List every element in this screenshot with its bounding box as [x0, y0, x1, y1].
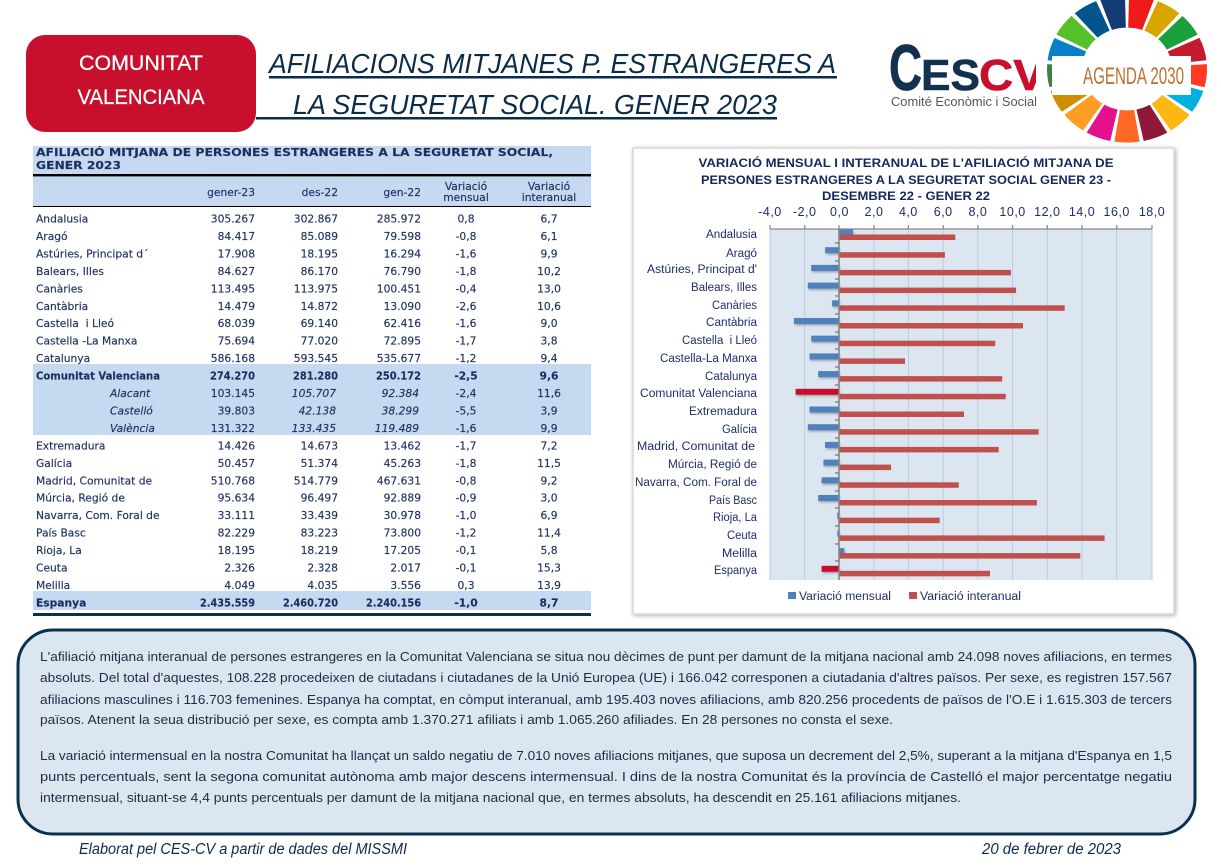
row: València: València: [110, 422, 155, 435]
row: Madrid: -0,8: [456, 474, 477, 487]
row: València: 119.489: [375, 422, 419, 435]
row: Astúries: Astúries, Principat d´: [36, 247, 148, 260]
row: Galícia: 50.457: [218, 457, 255, 470]
row: Melilla: [36, 579, 561, 592]
category labels: Castella-La Manxa: [660, 353, 758, 365]
row: Galícia: 51.374: [301, 457, 338, 470]
legend: Variació mensual: [799, 591, 891, 603]
row: Alacant: Alacant: [109, 387, 151, 400]
row: Aragó: 6,1: [540, 230, 558, 243]
row: Castelló: 42.138: [299, 404, 336, 418]
row: Ceuta: 2.017: [390, 562, 421, 574]
row: País Basc: País Basc: [36, 527, 86, 540]
row: Madrid: 9,2: [540, 474, 558, 487]
row: València: [110, 422, 558, 435]
row: Navarra: 30.978: [384, 509, 421, 522]
row: Madrid: 510.768: [211, 474, 255, 487]
top axis labels: 0,0: [830, 205, 849, 219]
row: Astúries: 16.294: [384, 247, 421, 260]
row: Balears: 86.170: [301, 265, 338, 278]
row: Múrcia: -0,9: [456, 492, 477, 505]
row: Comunitat Valenciana: 274.270: [210, 370, 255, 383]
row: Aragó: -0,8: [456, 230, 477, 243]
row: Castella-La Manxa: -1,7: [456, 335, 476, 348]
row: Andalusia: 305.267: [211, 212, 255, 226]
category labels: Castella i Lleó: [682, 335, 757, 347]
annual variation bars: [839, 234, 1105, 576]
row: Cantàbria: -2,6: [456, 300, 477, 313]
row: Rioja: 18.219: [301, 544, 338, 557]
row: Melilla: 13,9: [537, 579, 561, 592]
row: Espanya: 2.240.156: [366, 596, 421, 610]
row: Navarra: 6,9: [540, 509, 558, 522]
row: Andalusia: 6,7: [540, 212, 558, 226]
row: Catalunya: [36, 352, 558, 365]
row: País Basc: 82.229: [218, 527, 255, 540]
row: Andalusia: 302.867: [294, 212, 338, 226]
category labels: Extremadura: [689, 406, 758, 418]
paragraph 1: afiliacions masculines i 116.703 femenines. Espanya ha comptat, en còmput interanual, amb 195.403 noves afiliacions, amb 820.256 procedents de països de l'O.E i 1.615.303 de tercers: [40, 692, 1173, 707]
category labels: Andalusia: [706, 229, 758, 241]
badge: Comunitat Valenciana: [26, 35, 256, 132]
row: Castelló: 3,9: [540, 404, 558, 418]
row: País Basc: [36, 527, 561, 540]
top axis labels: 4,0: [899, 205, 918, 219]
paragraph 2: La variació intermensual en la nostra Comunitat ha llançat un saldo negatiu de 7.010 noves afiliacions mitjanes, que suposa un decrement del 2,5%, superant a la mitjana d'Espanya en 1,5: [40, 748, 1172, 763]
category labels: Aragó: [726, 248, 757, 260]
row: Comunitat Valenciana: Comunitat Valenciana: [36, 370, 160, 383]
paragraph 1: L'afiliació mitjana interanual de persones estrangeres en la Comunitat Valenciana se situa nou dècimes de punt per damunt de la mitjana nacional amb 24.098 noves afiliacions, en termes: [40, 649, 1173, 664]
row: Castella i Lleó: Castella i Lleó: [36, 317, 114, 330]
row: Astúries: 9,9: [540, 247, 558, 260]
logo: CES-CV: [890, 44, 1036, 106]
monthly variation bars: [794, 230, 853, 572]
chart title: VARIACIÓ MENSUAL I INTERANUAL DE L'AFILIACIÓ MITJANA DE: [698, 155, 1114, 170]
row: Catalunya: 593.545: [294, 352, 338, 365]
row: Comunitat Valenciana: 281.280: [293, 370, 338, 383]
row: Castella-La Manxa: 77.020: [301, 335, 338, 348]
row: València: 133.435: [292, 422, 336, 435]
row: Navarra: Navarra, Com. Foral de: [36, 509, 160, 522]
row: Andalusia: Andalusia: [36, 212, 88, 226]
row: Múrcia: 3,0: [540, 492, 558, 505]
title: AFILIACIONS MITJANES P. ESTRANGERES A: [267, 48, 836, 79]
row: Rioja: 5,8: [540, 544, 558, 557]
row: Balears: 10,2: [537, 265, 561, 278]
row: Alacant: [109, 387, 561, 400]
row: Castella i Lleó: -1,6: [456, 317, 477, 330]
row: Alacant: 11,6: [537, 387, 561, 400]
icon: Agenda 2030 wheel: [1039, 0, 1215, 150]
paragraph 1: absoluts. Del total d'aquestes, 108.228 procedeixen de ciutadans i ciutadanes de la Unió Europea (UE) i 166.042 corresponen a ciutadania d'altres països. Per sexe, es registren 157.567: [40, 670, 1172, 685]
row: Múrcia: 92.889: [384, 492, 421, 505]
row: Alacant: 103.145: [211, 387, 255, 400]
table heading: AFILIACIÓ MITJANA DE PERSONES ESTRANGERES A LA SEGURETAT SOCIAL,: [36, 146, 553, 159]
row: Cantàbria: [36, 300, 561, 313]
row: Cantàbria: Cantàbria: [36, 300, 88, 313]
badge: Comunitat Valenciana: COMUNITAT: [79, 52, 203, 75]
top axis labels: 18,0: [1139, 205, 1165, 219]
row: Galícia: [36, 457, 561, 470]
row: Múrcia: [36, 492, 558, 505]
table column headers: des-22: [302, 186, 338, 199]
top axis labels: 6,0: [934, 205, 953, 219]
paragraph 2: [40, 748, 1172, 805]
row: Ceuta: [36, 562, 561, 574]
legend: Variació interanual: [920, 591, 1021, 603]
row: Ceuta: 15,3: [537, 562, 561, 574]
row: Navarra: 33.111: [218, 509, 255, 522]
category labels: [635, 229, 758, 577]
row: Catalunya: Catalunya: [36, 352, 90, 365]
title: LA SEGURETAT SOCIAL. GENER 2023: [293, 89, 777, 120]
row: Catalunya: -1,2: [456, 352, 476, 365]
row: Cantàbria: 10,6: [537, 300, 561, 313]
row: Castella-La Manxa: Castella -La Manxa: [36, 335, 137, 348]
row: Andalusia: 0,8: [458, 212, 475, 226]
row: Ceuta: 2.328: [307, 562, 338, 574]
row: Castella-La Manxa: 3,8: [540, 335, 558, 348]
row: Astúries: [36, 247, 558, 260]
category labels: Ceuta: [727, 530, 758, 542]
row: Rioja: [36, 544, 558, 557]
row: Alacant: 105.707: [292, 387, 336, 400]
row: Canàries: 100.451: [377, 282, 421, 295]
row: Galícia: 11,5: [537, 457, 561, 470]
row: València: -1,6: [456, 422, 477, 435]
row: Madrid: [36, 474, 558, 487]
row: Ceuta: Ceuta: [36, 562, 68, 574]
row: Espanya: -1,0: [454, 596, 478, 610]
top axis labels: -4,0: [758, 205, 782, 219]
row: Extremadura: [36, 439, 558, 452]
row: País Basc: 73.800: [384, 527, 421, 540]
top axis labels: 16,0: [1104, 205, 1130, 219]
row: Extremadura: 14.673: [301, 439, 338, 452]
category labels: Galícia: [722, 424, 758, 436]
row: Múrcia: Múrcia, Regió de: [36, 492, 125, 505]
row: País Basc: -1,2: [456, 527, 476, 540]
category labels: Comunitat Valenciana: [640, 388, 758, 400]
row: Castella-La Manxa: 75.694: [218, 335, 255, 348]
top axis labels: 12,0: [1034, 205, 1060, 219]
row: País Basc: 11,4: [537, 527, 561, 540]
row: Balears: 76.790: [384, 265, 421, 278]
row: Alacant: -2,4: [456, 387, 477, 400]
category labels: Navarra, Com. Foral de: [635, 477, 757, 489]
row: Espanya: Espanya: [36, 596, 86, 610]
row: Múrcia: 95.634: [218, 492, 255, 505]
logo: CES-CV: CV: [979, 51, 1046, 100]
row: Castella i Lleó: [36, 317, 558, 330]
badge: Comunitat Valenciana: VALENCIANA: [78, 86, 204, 109]
table column headers: interanual: [522, 191, 576, 204]
top axis labels: 2,0: [865, 205, 883, 219]
row: Astúries: 17.908: [218, 247, 255, 260]
row: Extremadura: 14.426: [218, 439, 255, 452]
row: Extremadura: 13.462: [384, 439, 421, 452]
row: Extremadura: Extremadura: [36, 439, 105, 452]
legend: [788, 591, 1021, 603]
row: Galícia: Galícia: [36, 457, 72, 470]
row: Castella-La Manxa: [36, 335, 558, 348]
row: Canàries: -0,4: [456, 282, 477, 295]
logo: CES-CV: Comité Econòmic i Social: [891, 95, 1037, 109]
row: Comunitat Valenciana: 9,6: [540, 370, 558, 383]
table heading: [36, 146, 553, 172]
row: Balears: Balears, Illes: [36, 265, 104, 278]
row: Melilla: Melilla: [36, 579, 70, 592]
row: Extremadura: 7,2: [540, 439, 558, 452]
row: País Basc: 83.223: [301, 527, 338, 540]
row: Rioja: 18.195: [218, 544, 255, 557]
category labels: Catalunya: [705, 371, 758, 383]
row: Catalunya: 586.168: [211, 352, 255, 365]
row: València: 131.322: [211, 422, 255, 435]
row: Navarra: -1,0: [456, 509, 477, 522]
footer: source: Elaborat pel CES-CV a partir de dades del MISSMI: [79, 841, 408, 858]
chart title: [698, 155, 1114, 203]
row: Aragó: Aragó: [36, 230, 68, 243]
row: Castella-La Manxa: 72.895: [384, 335, 421, 348]
panel: commentary text: [18, 630, 1195, 834]
row: Espanya: 2.460.720: [283, 596, 338, 610]
row: Andalusia: 285.972: [377, 212, 421, 226]
row: Madrid: 467.631: [377, 474, 421, 487]
table column headers: Variació: [528, 180, 570, 193]
top axis labels: -2,0: [793, 205, 816, 219]
chart title: PERSONES ESTRANGERES A LA SEGURETAT SOCIAL GENER 23 -: [701, 173, 1111, 187]
row: Castelló: Castelló: [110, 404, 153, 418]
row: Castella i Lleó: 9,0: [540, 317, 558, 330]
row: Aragó: 84.417: [218, 230, 255, 243]
row: Rioja: -0,1: [456, 544, 476, 557]
row: Galícia: 45.263: [384, 457, 421, 470]
top axis labels: 10,0: [999, 205, 1026, 219]
row: Comunitat Valenciana: [36, 370, 558, 383]
top axis labels: [758, 205, 1165, 219]
row: Comunitat Valenciana: 250.172: [376, 370, 421, 383]
row: Astúries: 18.195: [301, 247, 338, 260]
category labels: Cantàbria: [706, 317, 758, 329]
row: Navarra: 33.439: [301, 509, 338, 522]
row: Extremadura: -1,7: [456, 439, 476, 452]
row: Ceuta: -0,1: [456, 562, 476, 574]
logo: CES-CV: ES: [921, 51, 980, 100]
row: Espanya: 2.435.559: [200, 596, 255, 610]
top axis labels: 14,0: [1069, 205, 1095, 219]
table column headers: [207, 180, 576, 204]
row: Aragó: 79.598: [384, 230, 421, 243]
table column headers: Variació: [445, 180, 487, 193]
category labels: Astúries, Principat d': [647, 264, 757, 276]
row: Castelló: 39.803: [218, 404, 255, 418]
row: Múrcia: 96.497: [301, 492, 338, 505]
table column headers: gener-23: [207, 186, 255, 199]
logo: CES-CV: C: [889, 31, 922, 104]
row: Rioja: 17.205: [384, 544, 421, 557]
paragraph 2: punts percentuals, sent la segona comunitat autònoma amb major descens intermensual. I dins de la nostra Comunitat és la província de Castelló el major percentatge negatiu: [40, 769, 1172, 784]
row: Navarra: [36, 509, 558, 522]
row: Castelló: 38.299: [382, 404, 419, 418]
table: affiliation data: [33, 146, 591, 616]
category labels: Canàries: [712, 300, 757, 312]
row: Canàries: 113.495: [211, 282, 255, 295]
row: Melilla: 0,3: [458, 579, 474, 592]
chart title: DESEMBRE 22 - GENER 22: [822, 189, 990, 203]
row: Cantàbria: 14.872: [301, 300, 338, 313]
row: Castella i Lleó: 69.140: [301, 317, 338, 330]
row: Ceuta: 2.326: [224, 562, 255, 574]
category labels: Espanya: [714, 565, 758, 577]
row: Canàries: Canàries: [36, 282, 83, 295]
top axis labels: 8,0: [968, 205, 987, 219]
row: Melilla: 3.556: [390, 579, 421, 592]
row: Rioja: Rioja, La: [36, 544, 82, 557]
category labels: Múrcia, Regió de: [668, 459, 757, 471]
row: Canàries: [36, 282, 561, 295]
row: Madrid: Madrid, Comunitat de: [36, 474, 152, 487]
row: Cantàbria: 13.090: [384, 300, 421, 313]
row: Melilla: 4.049: [224, 579, 255, 592]
plot area and grid: [770, 225, 1152, 580]
category labels: Balears, Illes: [691, 282, 757, 294]
table column headers: mensual: [443, 191, 489, 204]
paragraph 1: [40, 649, 1173, 727]
row: Madrid: 514.779: [294, 474, 338, 487]
panel: bar chart: [633, 148, 1174, 614]
row: Catalunya: 535.677: [377, 352, 421, 365]
table column headers: gen-22: [383, 186, 421, 199]
paragraph 2: intermensual, situant-se 4,4 punts percentuals per damunt de la mitjana nacional que, en termes absoluts, ha descendit en 25.161 afiliacions mitjanes.: [40, 790, 961, 805]
category labels: Melilla: [722, 548, 758, 560]
row: Astúries: -1,6: [456, 247, 477, 260]
title: [256, 48, 837, 120]
category labels: Rioja, La: [713, 512, 758, 524]
category labels: Madrid, Comunitat de: [637, 441, 755, 453]
row: Canàries: 113.975: [294, 282, 338, 295]
row: Balears: -1,8: [456, 265, 477, 278]
row: Balears: [36, 265, 561, 278]
vertical zero axis: [835, 229, 839, 580]
table heading: GENER 2023: [36, 160, 121, 172]
row: Espanya: 8,7: [540, 596, 558, 610]
row: Andalusia: [36, 212, 558, 226]
row: Castella i Lleó: 68.039: [218, 317, 255, 330]
row: Castelló: [110, 404, 558, 418]
row: Castella i Lleó: 62.416: [384, 317, 421, 330]
row: Alacant: 92.384: [382, 387, 419, 400]
row: Comunitat Valenciana: -2,5: [454, 370, 478, 383]
row: València: 9,9: [540, 422, 558, 435]
row: Canàries: 13,0: [537, 282, 561, 295]
row: Castelló: -5,5: [456, 404, 476, 418]
row: Catalunya: 9,4: [540, 352, 558, 365]
row: Espanya: [36, 596, 558, 610]
category labels: País Basc: [709, 495, 757, 507]
row: Cantàbria: 14.479: [218, 300, 255, 313]
row: Galícia: -1,8: [456, 457, 477, 470]
row: Aragó: 85.089: [301, 230, 338, 243]
row: Melilla: 4.035: [307, 579, 338, 592]
footer: date: 20 de febrer de 2023: [981, 841, 1121, 858]
row: Balears: 84.627: [218, 265, 255, 278]
paragraph 1: països. Atenent la seua distribució per sexe, es compta amb 1.370.271 afiliats i amb 1.065.260 afiliades. En 28 persones no consta el sexe.: [40, 712, 893, 727]
row: Aragó: [36, 230, 558, 243]
